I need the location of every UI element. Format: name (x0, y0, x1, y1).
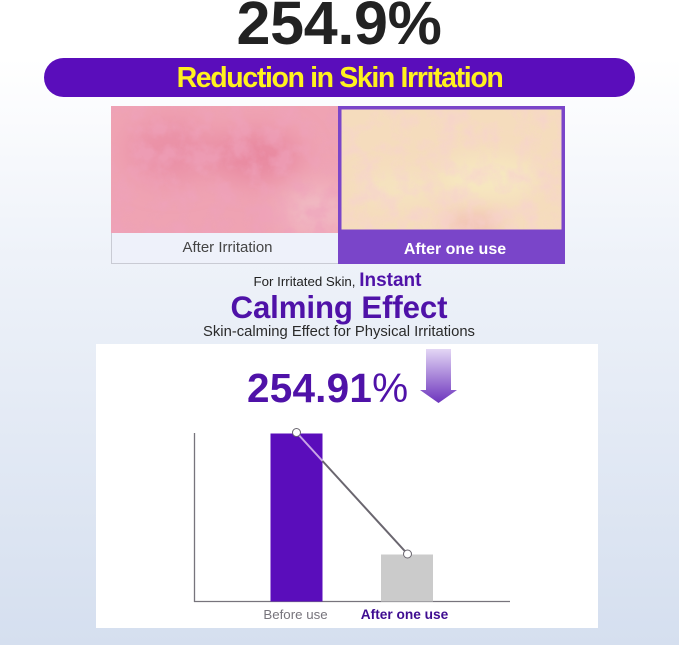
label: before use: Before use (263, 607, 328, 622)
stat: 254.91 percent: 254.91% (247, 365, 408, 411)
label: after one use: After one use (361, 607, 449, 622)
trend line (296, 432, 408, 554)
photo: skin after irritation (111, 106, 338, 233)
icon: gradient down arrow (420, 349, 457, 403)
bar: before use (270, 434, 322, 602)
panel: chart card (96, 344, 598, 628)
caption: after one use (338, 233, 565, 264)
bar: after one use (381, 554, 433, 602)
caption: after irritation (111, 233, 338, 264)
panel: before and after skin photos (111, 106, 565, 264)
banner text: Reduction in Skin Irritation (177, 62, 502, 94)
subheading line: for irritated skin, instant: For Irritated Skin, Instant (254, 270, 421, 291)
marker: after one use (404, 550, 412, 558)
banner: reduction in skin irritation (44, 58, 635, 97)
axes (194, 433, 510, 602)
caption text: After Irritation (182, 239, 273, 256)
photo: skin after one use (338, 106, 565, 233)
marker: before use (292, 428, 300, 436)
subheading: skin-calming effect: Skin-calming Effect for Physical Irritations (203, 324, 475, 340)
heading: calming effect: Calming Effect (231, 290, 447, 325)
bar chart (194, 428, 510, 622)
caption text: After one use (404, 240, 506, 258)
